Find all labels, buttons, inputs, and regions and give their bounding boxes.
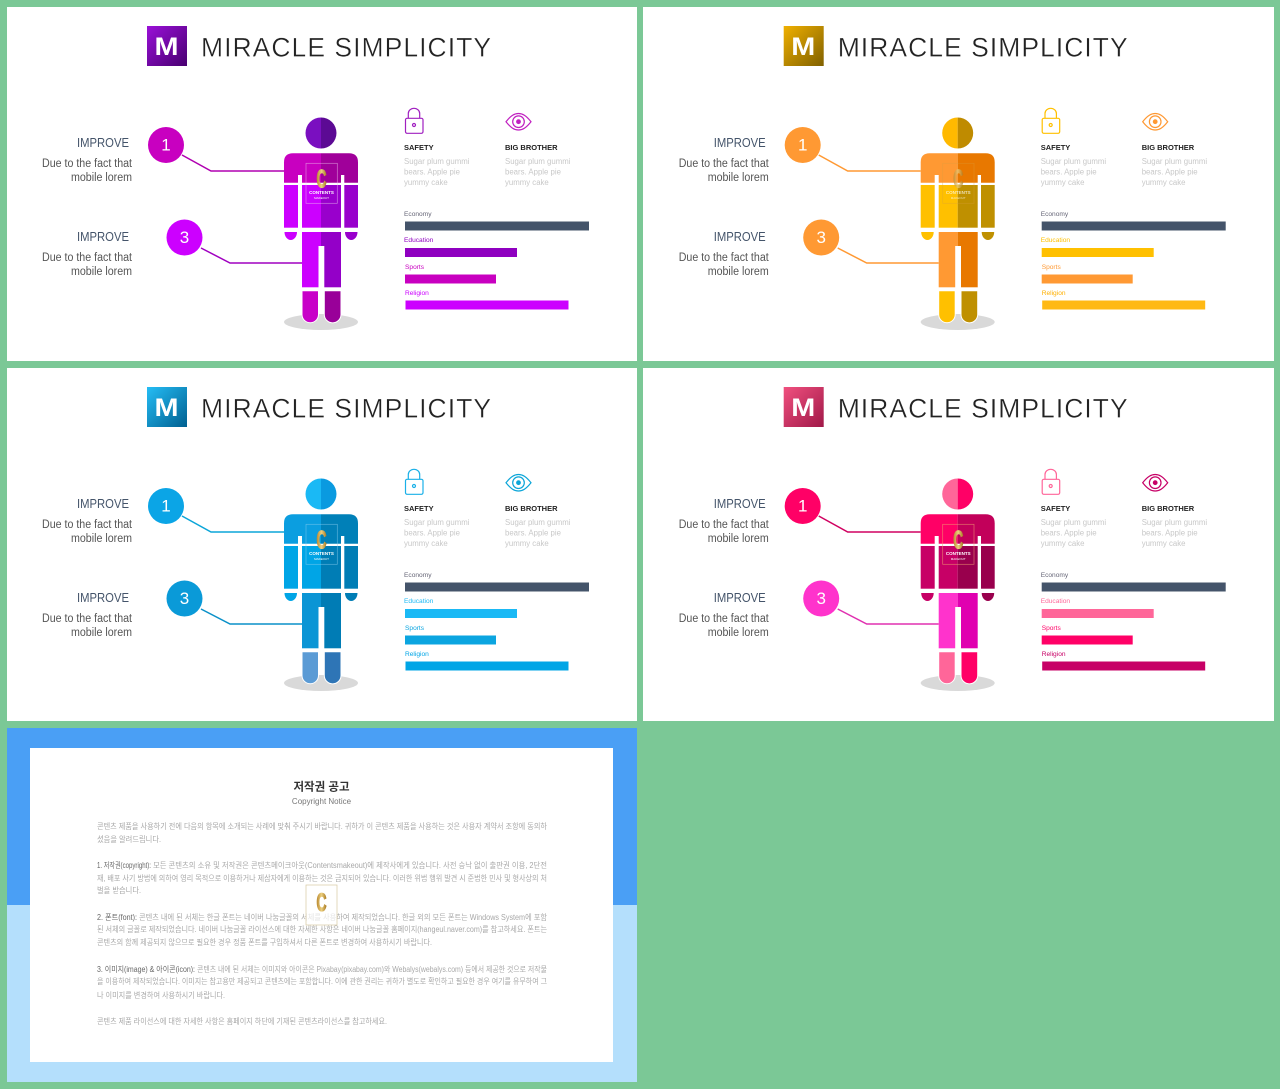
human figure: [284, 478, 358, 691]
bar chart: Sports: [1042, 264, 1061, 271]
panel: copyright notice: [7, 728, 637, 1082]
bar chart: Economy: [1041, 211, 1069, 218]
bar chart: Religion: [1042, 651, 1066, 658]
callout 3: [42, 580, 302, 639]
icon: lock: [406, 108, 423, 133]
callout 3: 3: [816, 228, 826, 247]
callout 3: 3: [180, 228, 189, 247]
text block: section 2: 2. 폰트(font):: [97, 913, 137, 922]
callout 1: Due to the fact that: [679, 519, 769, 531]
logo: blue M: M: [154, 394, 178, 422]
logo: pink M: M: [791, 394, 815, 422]
icon: lock: [1042, 469, 1060, 494]
text block: section 1: 모든 콘텐츠의 소유 및 저작권은 콘텐츠메이크아웃(Contentsmakeout)에 제작사에게 있습니다. 사전 승낙 없이 출판권 이용, 2단전: [153, 860, 547, 870]
text block: safety: SAFETY: [1041, 504, 1070, 513]
bar chart: Economy: [404, 211, 432, 218]
text block: big brother: Sugar plum gummi: [505, 157, 571, 166]
text block: big brother: BIG BROTHER: [505, 504, 558, 513]
watermark: C: [316, 889, 326, 917]
watermark: C: [953, 526, 963, 554]
callout 3: Due to the fact that: [679, 252, 769, 264]
watermark: [306, 163, 337, 203]
callout 1: 1: [161, 136, 171, 154]
callout 1: mobile lorem: [708, 172, 769, 184]
watermark: MAKEOUT: [951, 557, 966, 561]
text block: safety: yummy cake: [404, 178, 448, 187]
callout 3: [42, 220, 302, 278]
text block: big brother: yummy cake: [505, 539, 549, 548]
text block: safety: Sugar plum gummi: [404, 518, 470, 527]
text block: section 1: 1. 저작권(copyright):: [97, 860, 151, 870]
callout 3: mobile lorem: [708, 266, 769, 278]
callout 3: Due to the fact that: [42, 252, 133, 264]
callout 1: IMPROVE: [77, 135, 129, 150]
callout 3: mobile lorem: [71, 627, 132, 639]
text block: section 3: 을 이용하여 제작되었습니다. 이미지는 참고용만 제공되고 콘텐츠에는 포함합니다. 이에 관한 권리는 귀하가 별도로 확인하고 필요한 경우 여기를 유무하여 그: [97, 976, 547, 986]
callout 1: [42, 488, 284, 545]
callout 1: [679, 127, 921, 184]
text block: big brother: Sugar plum gummi: [505, 518, 571, 527]
text block: safety: Sugar plum gummi: [1041, 157, 1106, 166]
text block: big brother: bears. Apple pie: [1142, 528, 1198, 538]
text block: big brother: BIG BROTHER: [1142, 143, 1195, 152]
human figure: [921, 118, 995, 330]
text block: section 1: 재, 배포 사기 방법에 의하여 영리 목적으로 이용하거나 제삼자에게 이용하는 것은 금지되어 있습니다. 이러한 위법 행위 발견 시 준법한 민사 및 형사상의 처: [97, 873, 547, 883]
text block: safety: bears. Apple pie: [1041, 528, 1097, 538]
watermark: MAKEOUT: [951, 196, 966, 200]
text block: big brother: Sugar plum gummi: [1142, 157, 1207, 166]
logo: orange M: [784, 26, 824, 66]
bar chart: Sports: [405, 264, 425, 271]
text block: section 2: 콘텐츠 내에 된 서체는 한글 폰트는 네이버 나눔글꼴의 서체를 사용하여 제작되었습니다. 한글 외의 모든 폰트는 Windows System에 포함: [139, 912, 548, 922]
callout 1: IMPROVE: [714, 135, 766, 150]
text block: section 3: 콘텐츠 내에 된 서체는 이미지와 아이콘은 Pixabay(pixabay.com)와 Webalys(webalys.com) 등에서 제공한 것으로 저작물: [197, 964, 547, 974]
text block: safety: bears. Apple pie: [1041, 168, 1097, 176]
text block: safety: bears. Apple pie: [404, 168, 460, 176]
text block: intro: [97, 821, 548, 844]
title: MIRACLE SIMPLICITY: [838, 32, 1128, 62]
logo: pink M: [784, 387, 824, 427]
callout 1: [42, 127, 284, 184]
watermark: CONTENTS: [309, 551, 334, 556]
text block: safety: [404, 504, 470, 548]
watermark: [306, 524, 337, 564]
bar chart: Sports: [405, 625, 425, 632]
watermark: MAKEOUT: [314, 196, 329, 200]
text block: safety: yummy cake: [1041, 178, 1084, 187]
bar chart: Sports: [1042, 625, 1061, 632]
text block: safety: Sugar plum gummi: [404, 157, 470, 166]
bar chart: Education: [404, 237, 434, 244]
text block: safety: [1041, 504, 1106, 548]
logo: orange M: M: [791, 33, 815, 61]
heading: copyright notice: [292, 780, 352, 806]
logo: purple M: M: [154, 33, 178, 61]
watermark: CONTENTS: [946, 190, 971, 195]
watermark: [943, 163, 974, 203]
text block: big brother: yummy cake: [1142, 539, 1185, 548]
text block: section 3: [97, 964, 547, 1000]
icon: eye: [1143, 114, 1168, 130]
human figure: [284, 118, 358, 330]
icon: eye: [506, 114, 531, 130]
callout 1: mobile lorem: [71, 172, 132, 184]
bar chart: Education: [1041, 598, 1070, 605]
icon: lock: [406, 469, 423, 494]
text block: section 3: 3. 이미지(image) & 아이콘(icon):: [97, 964, 195, 974]
panel: blue slide: [7, 368, 637, 721]
watermark: C: [316, 526, 326, 554]
text block: closing: 콘텐츠 제품 라이선스에 대한 자세한 사항은 홈페이지 하단에 기재된 콘텐츠라이선스를 참고하세요.: [97, 1016, 387, 1026]
bar chart: Education: [404, 598, 434, 605]
text block: big brother: bears. Apple pie: [505, 528, 561, 538]
text block: big brother: [1142, 504, 1207, 548]
bar chart: Religion: [1042, 290, 1066, 297]
text block: safety: yummy cake: [1041, 539, 1084, 548]
bar chart: [1041, 211, 1226, 310]
callout 1: mobile lorem: [708, 533, 769, 545]
text block: safety: yummy cake: [404, 539, 448, 548]
callout 3: mobile lorem: [708, 627, 769, 639]
text block: safety: SAFETY: [404, 504, 434, 513]
text block: big brother: Sugar plum gummi: [1142, 518, 1207, 527]
text block: big brother: bears. Apple pie: [505, 168, 561, 176]
icon: lock: [1042, 108, 1060, 133]
text block: section 1: 벌을 받습니다.: [97, 885, 141, 895]
text block: section 1: [97, 860, 547, 895]
bar chart: [404, 572, 589, 670]
text block: big brother: [505, 504, 571, 548]
watermark: CONTENTS: [309, 190, 334, 195]
callout 1: 1: [798, 496, 807, 516]
text block: safety: [404, 143, 470, 187]
logo: blue M: [147, 387, 187, 427]
text block: safety: SAFETY: [1041, 143, 1070, 152]
callout 1: 1: [161, 496, 171, 516]
callout 3: IMPROVE: [77, 229, 129, 244]
text block: big brother: BIG BROTHER: [1142, 504, 1195, 513]
title: MIRACLE SIMPLICITY: [201, 394, 491, 424]
bar chart: Religion: [405, 651, 429, 658]
callout 3: Due to the fact that: [679, 613, 769, 625]
callout 3: IMPROVE: [714, 590, 766, 605]
watermark: [306, 885, 337, 925]
watermark: MAKEOUT: [314, 557, 329, 561]
watermark: CONTENTS: [946, 551, 971, 556]
callout 3: Due to the fact that: [42, 613, 133, 625]
callout 1: Due to the fact that: [42, 158, 133, 170]
panel: pink slide: [643, 368, 1274, 721]
text block: safety: Sugar plum gummi: [1041, 518, 1106, 527]
title: MIRACLE SIMPLICITY: [201, 32, 491, 62]
watermark: [943, 524, 974, 564]
callout 3: [679, 220, 939, 278]
text block: safety: SAFETY: [404, 143, 434, 152]
bar chart: Education: [1041, 237, 1070, 244]
text block: intro: 콘텐츠 제품을 사용하기 전에 다음의 항목에 소개되는 사례에 맞춰 주시기 바랍니다. 귀하가 이 콘텐츠 제품을 사용하는 것은 사용자 계약서 조항에 동의하: [97, 821, 548, 831]
title: MIRACLE SIMPLICITY: [838, 394, 1128, 424]
callout 3: IMPROVE: [77, 590, 129, 605]
bar chart: [1041, 572, 1226, 670]
text block: section 2: 콘텐츠의 함께 제공되지 않으므로 필요한 경우 정품 폰트를 구입하셔서 다른 폰트로 변경하여 사용하시기 바랍니다.: [97, 937, 432, 947]
callout 3: mobile lorem: [71, 266, 132, 278]
text block: safety: [1041, 143, 1106, 187]
text block: big brother: [505, 143, 571, 187]
text block: big brother: bears. Apple pie: [1142, 168, 1198, 176]
callout 3: IMPROVE: [714, 229, 766, 244]
icon: eye: [506, 474, 531, 491]
text block: safety: bears. Apple pie: [404, 528, 460, 538]
bar chart: Religion: [405, 290, 429, 297]
heading: copyright notice: Copyright Notice: [292, 797, 352, 806]
text block: big brother: yummy cake: [1142, 178, 1185, 187]
callout 1: [679, 488, 921, 545]
callout 3: 3: [816, 589, 826, 608]
watermark: C: [953, 166, 963, 194]
callout 3: [679, 580, 939, 639]
callout 1: IMPROVE: [77, 496, 129, 511]
heading: copyright notice: 저작권 공고: [293, 780, 350, 794]
text block: big brother: yummy cake: [505, 178, 549, 187]
text block: big brother: BIG BROTHER: [505, 143, 558, 152]
watermark: C: [316, 166, 326, 194]
text block: section 2: 된 서체의 글꼴로 제작되었습니다. 네이버 나눔글꼴 라이선스에 대한 자세한 사항은 네이버 나눔글꼴 홈페이지(hangeul.naver.com)를 참고하세요. 폰트는: [97, 924, 547, 934]
callout 1: IMPROVE: [714, 496, 766, 511]
text block: section 3: 나 이미지를 변경하여 사용하시기 바랍니다.: [97, 990, 225, 1000]
bar chart: Economy: [404, 572, 432, 579]
icon: eye: [1143, 474, 1168, 491]
callout 1: Due to the fact that: [679, 158, 769, 170]
bar chart: [404, 211, 589, 310]
text block: section 2: [97, 912, 548, 947]
bar chart: Economy: [1041, 572, 1069, 579]
text block: big brother: [1142, 143, 1207, 187]
logo: purple M: [147, 26, 187, 66]
callout 3: 3: [180, 589, 189, 608]
human figure: [921, 478, 995, 691]
text block: intro: 셨음을 알려드립니다.: [97, 834, 161, 844]
panel: purple slide: [7, 7, 637, 361]
panel: orange slide: [643, 7, 1274, 361]
callout 1: 1: [798, 136, 807, 154]
callout 1: mobile lorem: [71, 533, 132, 545]
callout 1: Due to the fact that: [42, 519, 133, 531]
